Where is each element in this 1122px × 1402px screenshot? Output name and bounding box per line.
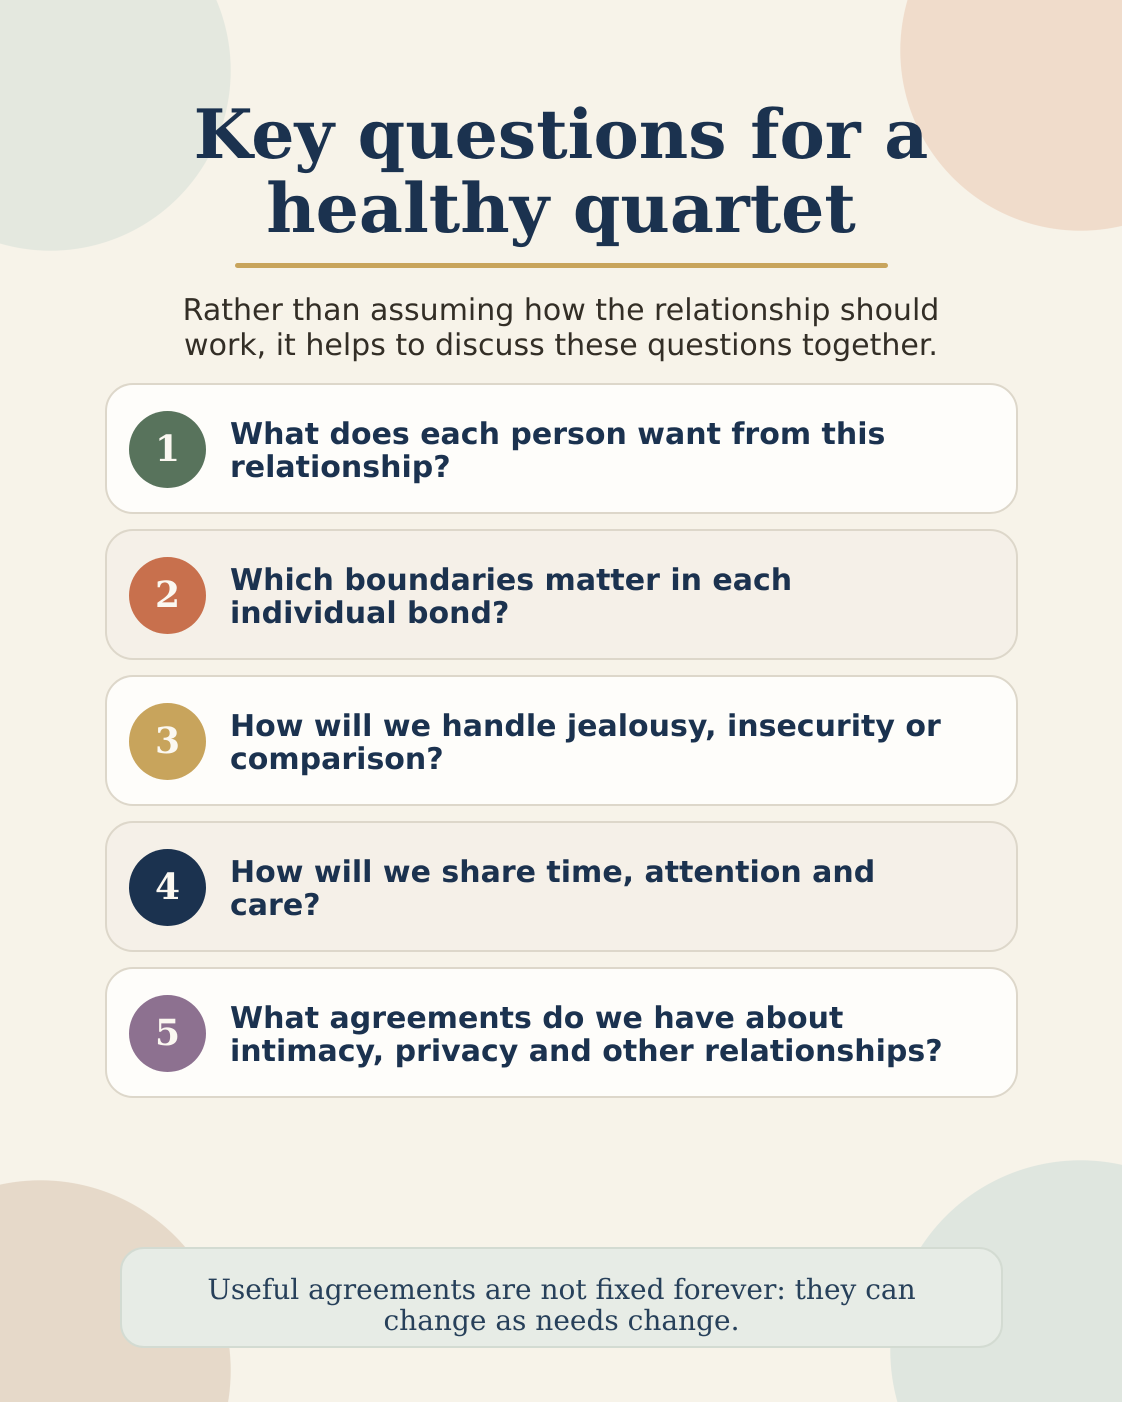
question 5: What agreements do we have about (230, 1001, 843, 1036)
footer text (207, 1273, 916, 1337)
question 2: individual bond? (230, 596, 509, 631)
decorative circle: top right (900, 0, 1122, 231)
question 5 (230, 1001, 943, 1069)
question 2: Which boundaries matter in each (230, 563, 792, 598)
number badge 2 (129, 557, 206, 634)
number badge 3 (129, 703, 206, 780)
question 3 (230, 709, 941, 777)
question 5: intimacy, privacy and other relationships? (230, 1034, 943, 1069)
question 1 (230, 417, 885, 485)
number badge 1 (129, 411, 206, 488)
number badge 4 (129, 849, 206, 926)
card 4 (105, 821, 1018, 952)
footer text: Useful agreements are not fixed forever: they can (207, 1273, 916, 1306)
question 3: comparison? (230, 742, 444, 777)
decorative circle: top left (0, 0, 231, 251)
title: Key questions for a (194, 95, 928, 175)
card 2 (105, 529, 1018, 660)
decorative circle: bottom right (890, 1160, 1122, 1402)
title underline (235, 263, 888, 268)
question 3: How will we handle jealousy, insecurity or (230, 709, 941, 744)
question 2 (230, 563, 792, 631)
number badge 5 (129, 995, 206, 1072)
number badge 1: 1 (155, 428, 180, 470)
number badge 5: 5 (155, 1012, 180, 1054)
question 1: relationship? (230, 450, 451, 485)
question 1: What does each person want from this (230, 417, 885, 452)
title (194, 95, 928, 249)
number badge 2: 2 (155, 574, 180, 616)
footer note (120, 1247, 1003, 1348)
number badge 4: 4 (155, 866, 180, 908)
question 4: care? (230, 888, 321, 923)
intro text (183, 293, 939, 363)
question 4 (230, 855, 875, 923)
number badge 3: 3 (155, 720, 180, 762)
card 1 (105, 383, 1018, 514)
intro text: Rather than assuming how the relationship should (183, 293, 939, 328)
decorative circle: bottom left (0, 1180, 231, 1402)
question 4: How will we share time, attention and (230, 855, 875, 890)
intro text: work, it helps to discuss these questions together. (184, 328, 938, 363)
card 5 (105, 967, 1018, 1098)
title: healthy quartet (266, 169, 856, 249)
card 3 (105, 675, 1018, 806)
footer text: change as needs change. (383, 1304, 740, 1337)
